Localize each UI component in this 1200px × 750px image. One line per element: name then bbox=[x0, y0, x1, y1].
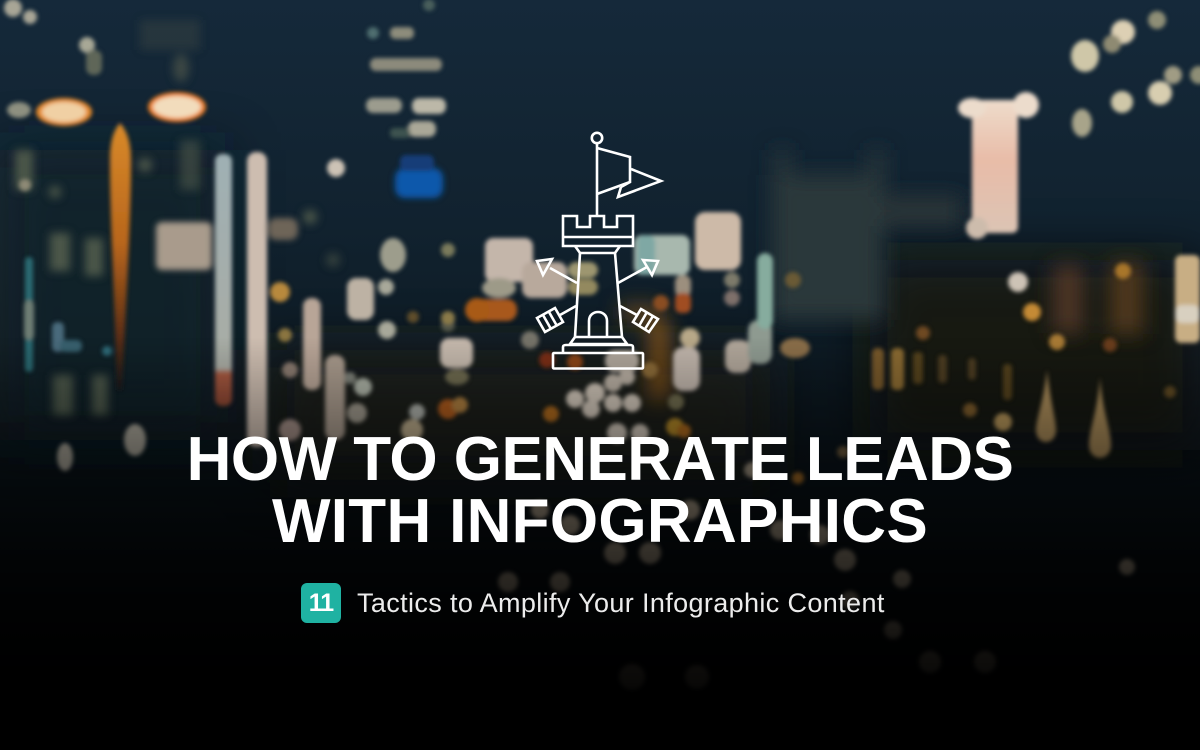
centre blocks bbox=[485, 238, 533, 282]
street lamps bbox=[36, 98, 92, 126]
blue light bbox=[395, 168, 443, 198]
right billboard bbox=[972, 100, 1018, 233]
icon: fletched arrows bbox=[537, 306, 658, 332]
icon: flag on pole bbox=[592, 133, 661, 216]
title: WITH INFOGRAPHICS bbox=[272, 487, 928, 556]
subtitle: Tactics to Amplify Your Infographic Content bbox=[357, 588, 885, 618]
tower windows top bbox=[390, 27, 414, 39]
dim buildings bbox=[620, 150, 1143, 400]
right top windows bbox=[1071, 11, 1200, 137]
badge: number 11 bbox=[301, 583, 341, 623]
bokeh dots: cream bbox=[57, 159, 1028, 471]
right bottom lights bbox=[1175, 255, 1200, 343]
badge: number 11: 11 bbox=[309, 589, 333, 617]
dim windows bbox=[15, 20, 340, 415]
bokeh dots: amber bbox=[270, 243, 1176, 484]
vertical light strips bbox=[247, 152, 267, 447]
billboard left bbox=[156, 218, 298, 270]
orange lamp post bbox=[110, 123, 131, 390]
bokeh dots: lower street bbox=[498, 500, 1135, 690]
small lamps top left bbox=[4, 0, 22, 17]
title bbox=[187, 425, 1013, 556]
icon: upward arrows bbox=[537, 259, 658, 283]
title: HOW TO GENERATE LEADS bbox=[187, 425, 1013, 494]
icon: tower bbox=[553, 216, 643, 368]
soft dark masses bbox=[0, 150, 1200, 480]
